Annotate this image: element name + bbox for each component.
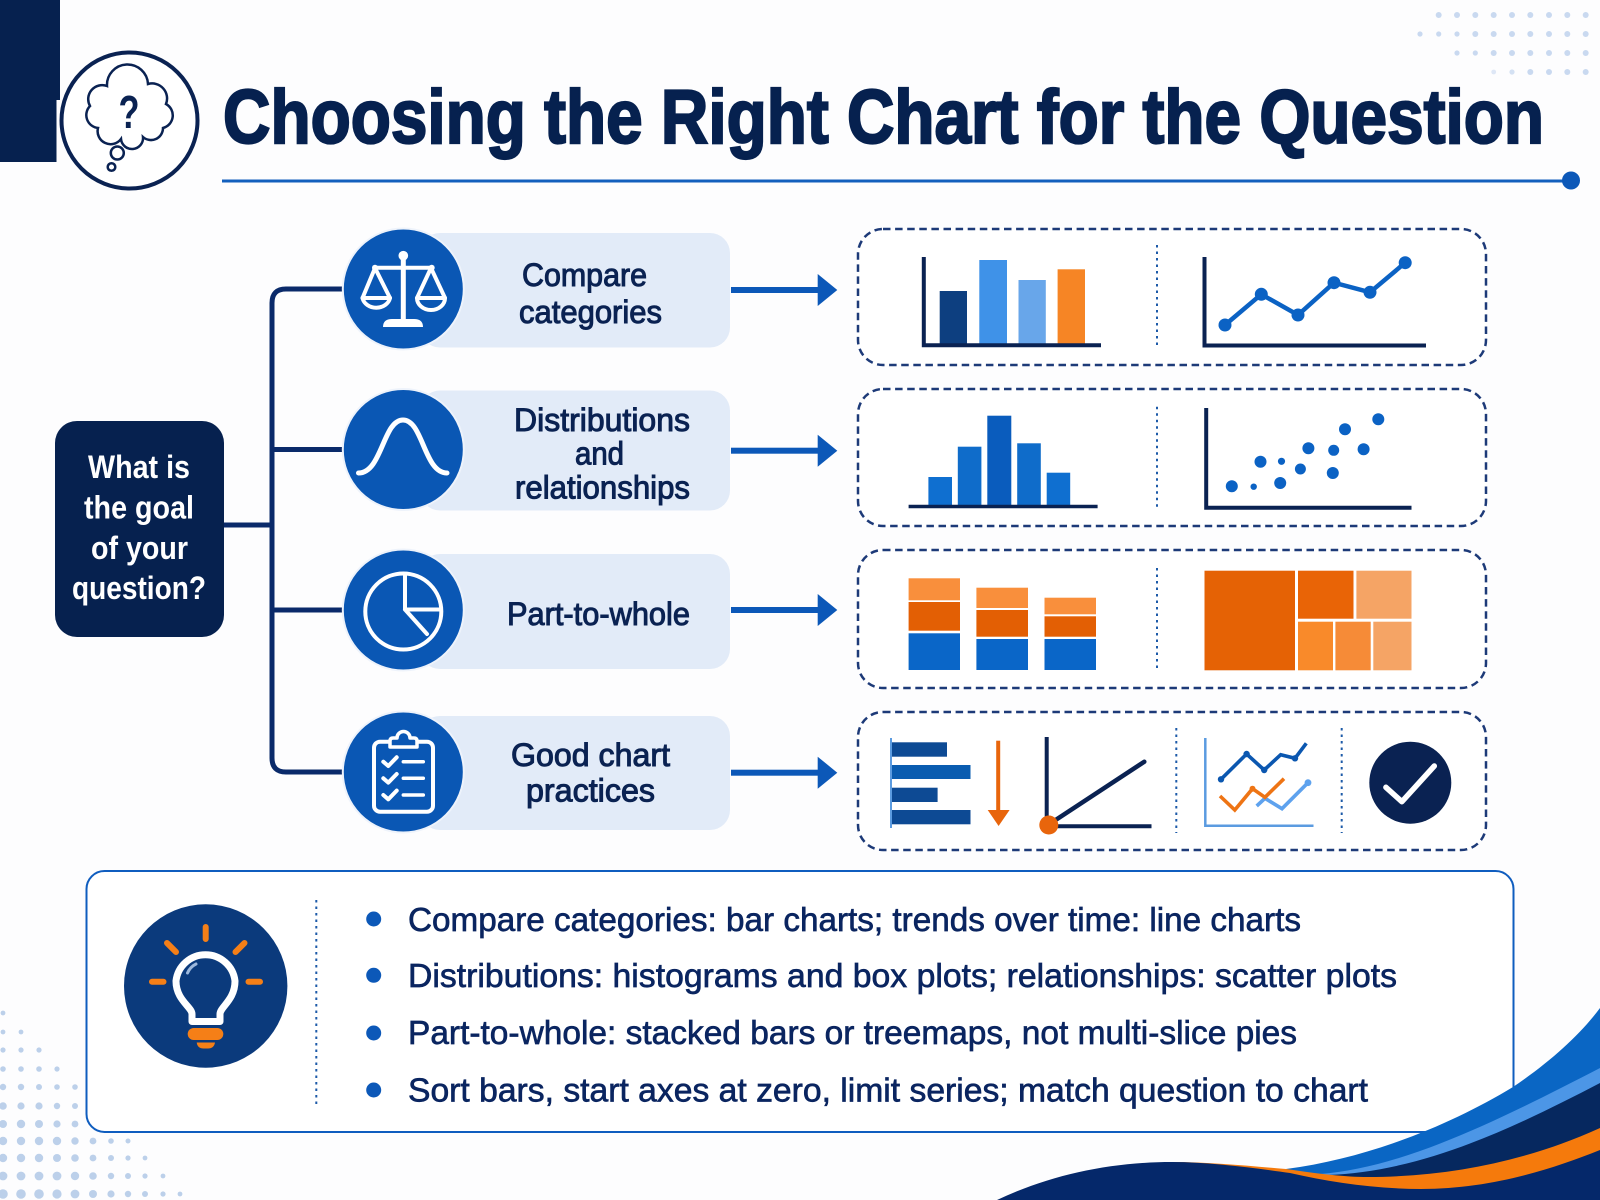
arrow: row 3: [731, 594, 837, 626]
decorative dot pattern: bottom left: [0, 1011, 182, 1199]
row 2: distributions label: Distributions: [514, 402, 690, 438]
icon: balance scale: [343, 228, 464, 350]
scatter plot: [1206, 408, 1412, 508]
treemap: [1204, 571, 1412, 670]
question box: What is: [88, 449, 190, 485]
arrow: row 1: [731, 274, 837, 306]
row 2: distributions label: relationships: [515, 469, 690, 505]
question box: of your: [91, 530, 188, 566]
row 1: compare categories label: Compare: [522, 257, 647, 293]
histogram: [909, 416, 1098, 506]
decision tree connectors: [224, 289, 345, 772]
row 4: good chart practices label: practices: [526, 773, 655, 809]
row 4: good chart practices label: Good chart: [511, 737, 670, 773]
axis starting at zero: [1039, 737, 1152, 834]
arrow: sort order: [988, 741, 1010, 826]
icon: check mark: [1369, 742, 1451, 824]
arrow: row 2: [731, 435, 837, 467]
panel: key takeaways: [86, 871, 1514, 1132]
bar chart: [924, 257, 1101, 345]
row 2: distributions label: and: [575, 436, 624, 472]
takeaway 1: Compare categories: bar charts; trends over time: line charts: [408, 901, 1301, 938]
icon: bell curve: [343, 389, 464, 510]
panel: part-to-whole charts: [858, 550, 1486, 688]
panel: distribution and relationship charts: [858, 389, 1486, 526]
row 2: distributions label: [420, 390, 730, 510]
decorative dot pattern: top right: [1417, 12, 1589, 75]
panel: compare categories charts: [858, 229, 1486, 365]
question box: the goal: [84, 490, 194, 526]
icon: checklist clipboard: [343, 712, 464, 832]
panel: good chart practices: [858, 712, 1486, 850]
stacked bars: [909, 578, 1096, 670]
title rule with end dot: [222, 172, 1580, 190]
arrow: row 4: [731, 757, 837, 789]
takeaway 3: Part-to-whole: stacked bars or treemaps, not multi-slice pies: [408, 1014, 1297, 1051]
question box: [55, 421, 224, 637]
row 1: compare categories label: [420, 233, 730, 348]
header accent block: [0, 0, 60, 162]
row 4: good chart practices label: [420, 716, 730, 830]
row 3: part-to-whole label: [420, 554, 730, 669]
line chart: [1204, 256, 1426, 346]
question box: question?: [72, 570, 206, 606]
row 1: compare categories label: categories: [519, 294, 662, 330]
icon: thought bubble with question mark: ?: [118, 86, 140, 138]
decorative corner wave: [997, 1008, 1600, 1200]
limited series line chart: [1205, 738, 1314, 826]
sorted horizontal bars: [891, 738, 970, 828]
row 3: part-to-whole label: Part-to-whole: [507, 596, 690, 632]
icon: thought bubble with question mark: [62, 52, 198, 188]
takeaway 4: Sort bars, start axes at zero, limit series; match question to chart: [408, 1072, 1368, 1109]
takeaway 2: Distributions: histograms and box plots; relationships: scatter plots: [408, 957, 1397, 994]
icon: light bulb: [124, 904, 287, 1068]
icon: pie chart: [343, 550, 464, 670]
